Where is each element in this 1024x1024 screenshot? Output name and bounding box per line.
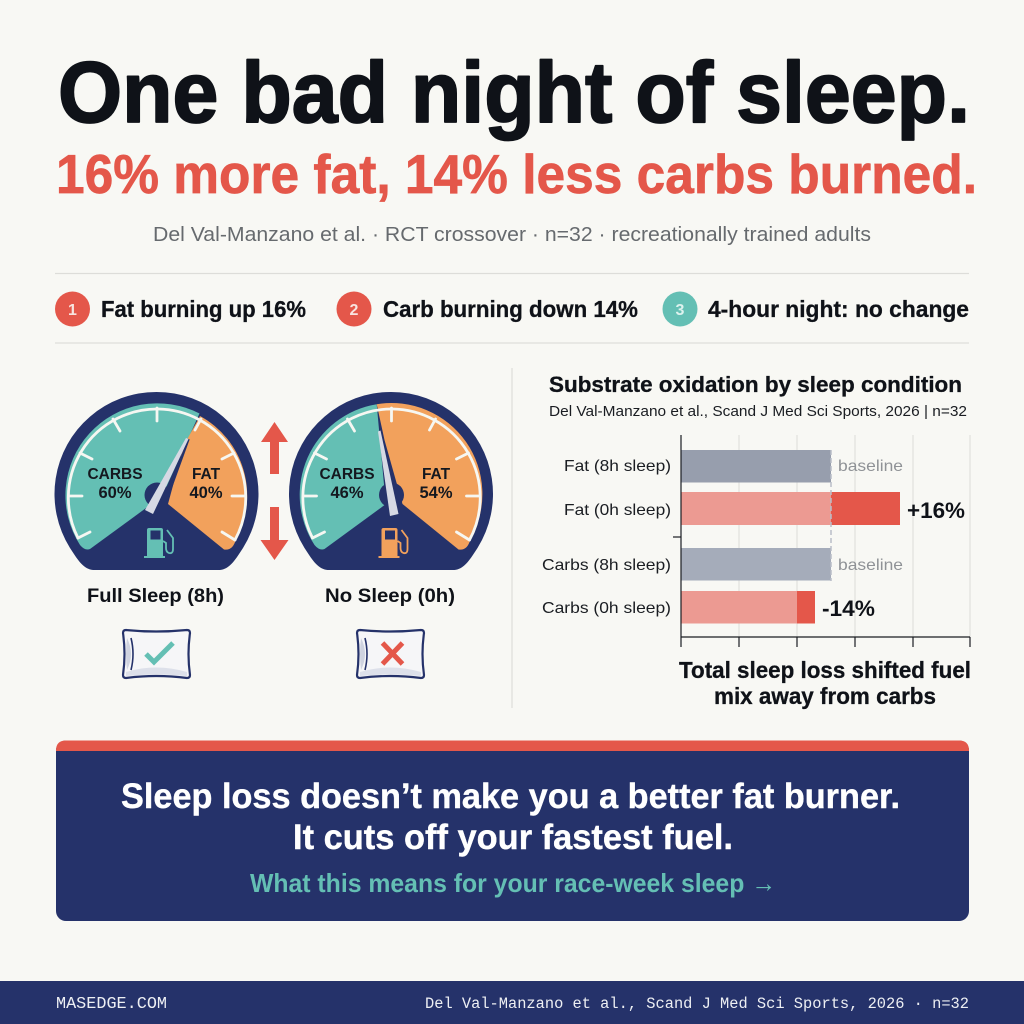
- row labels: Carbs (0h sleep): [542, 600, 671, 617]
- finding 1: 1: [68, 302, 77, 319]
- value labels: baseline: [838, 458, 903, 475]
- chart takeaway: Total sleep loss shifted fuel: [679, 657, 971, 683]
- panel: fuel gauges: [55, 392, 493, 678]
- needle: [145, 438, 188, 514]
- carbs label: CARBS: [87, 466, 143, 483]
- carbs label: [319, 466, 375, 502]
- label: no sleep: No Sleep (0h): [325, 586, 455, 607]
- icon: teal fuel pump: [144, 528, 173, 558]
- bar: fat 0h: [681, 492, 900, 525]
- title: One bad night of sleep.: [58, 45, 970, 141]
- finding 2: 2: [350, 302, 359, 319]
- carbs label: 46%: [330, 484, 364, 502]
- finding 1: [55, 292, 306, 326]
- finding 3: 3: [676, 302, 685, 319]
- chart takeaway: [679, 657, 971, 709]
- finding 3: 4-hour night: no change: [708, 296, 969, 322]
- gauge: no sleep: [289, 392, 493, 570]
- row labels: Carbs (8h sleep): [542, 557, 671, 574]
- bar: carbs 0h: [681, 591, 815, 624]
- chart takeaway: mix away from carbs: [714, 683, 936, 709]
- value labels: -14%: [822, 596, 875, 621]
- footer brand: MASEDGE.COM: [56, 994, 167, 1013]
- finding 1: Fat burning up 16%: [101, 296, 306, 322]
- gauge: full sleep: [55, 392, 258, 570]
- carbs label: 60%: [98, 484, 132, 502]
- fat label: FAT: [422, 466, 451, 483]
- fat label: 54%: [419, 484, 453, 502]
- value labels: baseline: [838, 557, 903, 574]
- finding 2: Carb burning down 14%: [383, 296, 638, 322]
- banner headline: [121, 776, 900, 857]
- banner headline: Sleep loss doesn’t make you a better fat burner.: [121, 776, 900, 816]
- chart source: Del Val-Manzano et al., Scand J Med Sci Sports, 2026 | n=32: [549, 403, 967, 420]
- panel: takeaway banner: [56, 740, 969, 921]
- bar chart: [542, 435, 970, 647]
- carbs label: CARBS: [319, 466, 375, 483]
- banner headline: It cuts off your fastest fuel.: [293, 817, 733, 857]
- row labels: [542, 458, 671, 617]
- row labels: Fat (8h sleep): [564, 458, 671, 475]
- key findings row: [55, 292, 969, 326]
- fat label: [189, 466, 223, 502]
- carbs label: [87, 466, 143, 502]
- icon: orange fuel pump: [378, 528, 408, 558]
- panel: substrate oxidation chart: [542, 372, 971, 709]
- needle: [378, 430, 398, 516]
- footer citation: Del Val-Manzano et al., Scand J Med Sci Sports, 2026 · n=32: [425, 995, 969, 1013]
- value labels: [822, 458, 965, 621]
- footer: [0, 981, 1024, 1024]
- fat label: 40%: [189, 484, 223, 502]
- row labels: Fat (0h sleep): [564, 502, 671, 519]
- arrow: up: [261, 422, 288, 474]
- chart title: Substrate oxidation by sleep condition: [549, 372, 962, 397]
- bar: fat 8h: [681, 450, 831, 482]
- icon: pillow with check: [123, 630, 190, 678]
- finding 3: [662, 292, 969, 326]
- label: full sleep: Full Sleep (8h): [87, 586, 224, 607]
- fat label: FAT: [192, 466, 221, 483]
- value labels: +16%: [907, 498, 965, 523]
- subtitle: 16% more fat, 14% less carbs burned.: [56, 143, 977, 205]
- bar: carbs 8h: [681, 548, 831, 580]
- fat label: [419, 466, 453, 502]
- finding 2: [336, 292, 638, 326]
- source line: Del Val-Manzano et al. · RCT crossover · n=32 · recreationally trained adults: [153, 223, 871, 246]
- icon: pillow with cross: [357, 630, 424, 678]
- banner call to action: What this means for your race-week sleep →: [250, 868, 776, 898]
- arrow: down: [260, 507, 288, 560]
